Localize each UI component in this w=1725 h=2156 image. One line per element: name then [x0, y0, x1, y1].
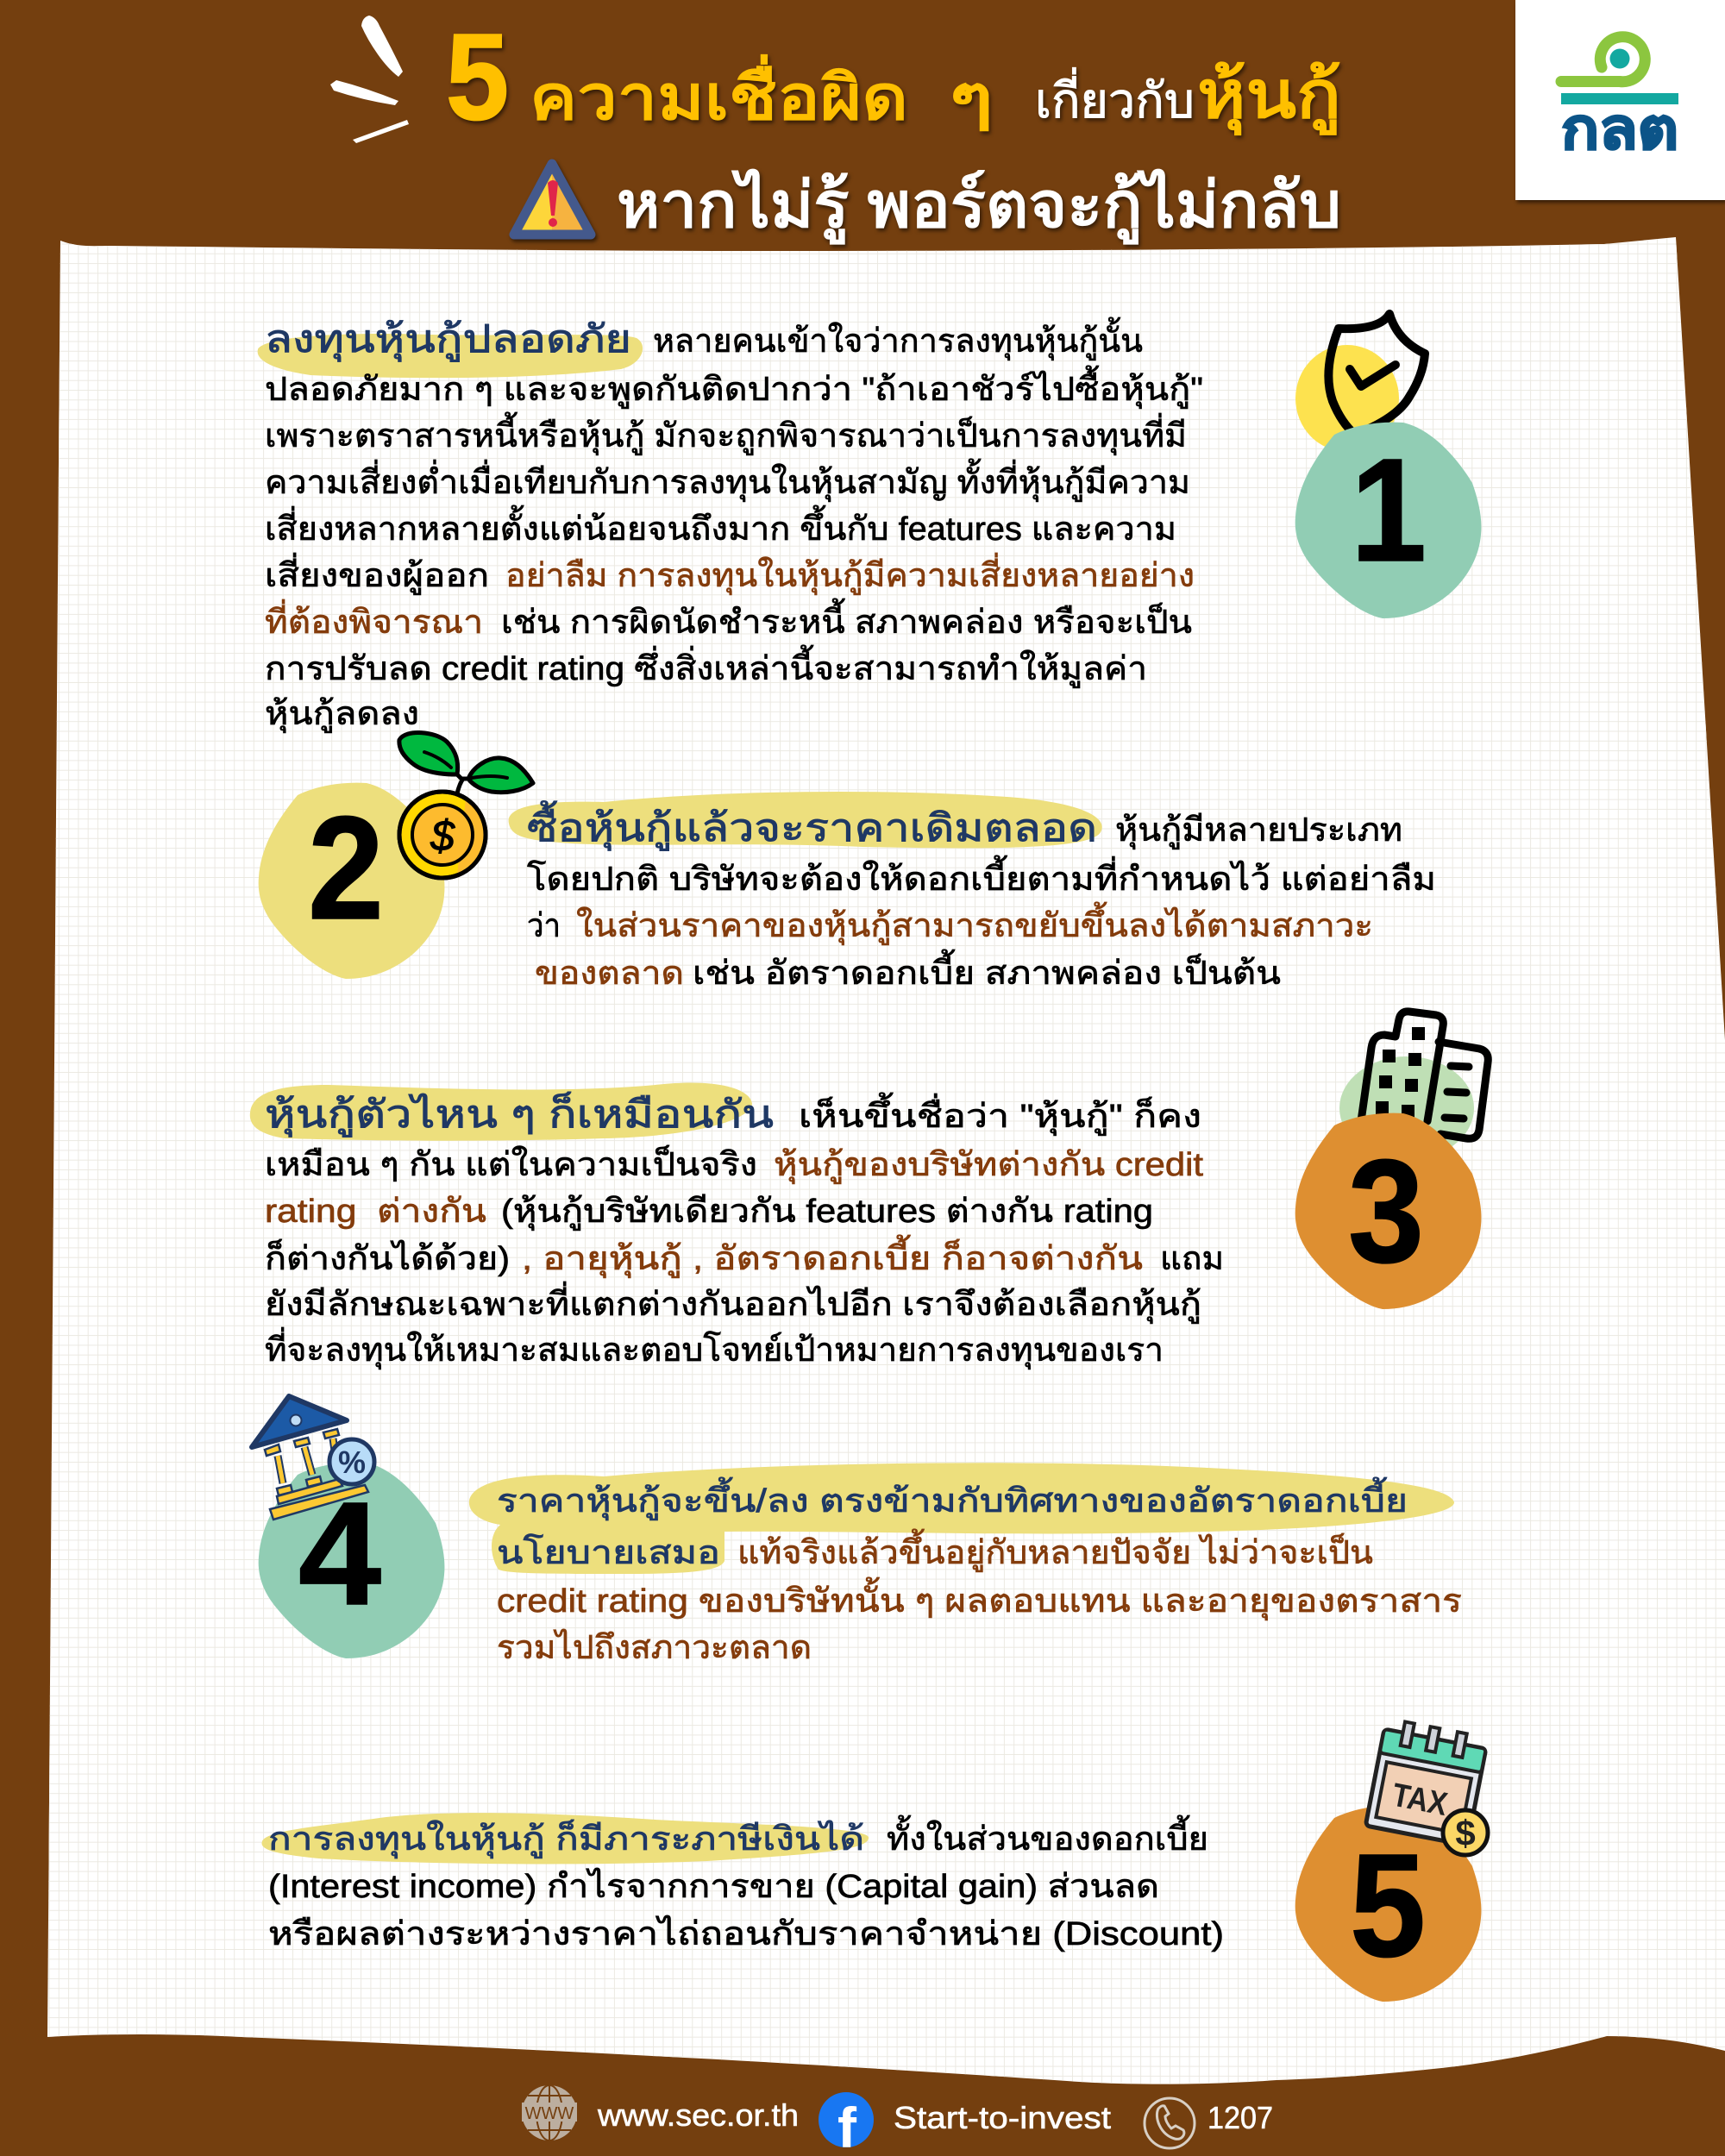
body text 1	[265, 317, 1203, 733]
title: หุ้นกู้	[1197, 59, 1341, 136]
body text 3: (หุ้นกู้บริษัทเดียวกัน features ต่างกัน rating	[501, 1194, 1153, 1231]
heading highlight 3	[250, 1082, 752, 1141]
icon: phone	[1145, 2098, 1195, 2148]
heading highlight 5	[262, 1813, 869, 1864]
title	[446, 9, 1341, 245]
number badge 1	[1295, 423, 1481, 618]
body text 5: ทั้งในส่วนของดอกเบี้ย	[887, 1814, 1208, 1858]
icon: facebook	[819, 2092, 874, 2156]
body text 2: ของตลาด	[535, 956, 684, 992]
number badge 4 background	[259, 1463, 444, 1658]
body text 4: แท้จริงแล้วขึ้นอยู่กับหลายปัจจัย ไม่ว่าจะเป็น	[737, 1528, 1373, 1572]
yellow circle	[1295, 345, 1399, 452]
body text 3: rating ต่างกัน	[265, 1194, 486, 1230]
body text 2	[527, 812, 1436, 992]
body text 4	[497, 1528, 1462, 1666]
icon: globe: WWW	[525, 2104, 574, 2123]
body text 1: เสี่ยงหลากหลายตั้งแต่น้อยจนถึงมาก ขึ้นกับ features และความ	[265, 505, 1176, 548]
body text 3: หุ้นกู้ของบริษัทต่างกัน credit	[774, 1147, 1203, 1184]
icon: shield	[1328, 314, 1425, 435]
footer	[522, 2085, 1273, 2156]
title line 2: หากไม่รู้ พอร์ตจะกู้ไม่กลับ	[617, 167, 1341, 245]
heading highlight 2	[509, 792, 1102, 848]
icon: coin with leaves: $	[430, 812, 455, 860]
website: www.sec.or.th	[597, 2097, 799, 2133]
body text 3: ก็ต่างกันได้ด้วย)	[265, 1238, 510, 1277]
body text 4: รวมไปถึงสภาวะตลาด	[497, 1629, 812, 1666]
body text 5: (Interest income) กำไรจากการขาย (Capital gain) ส่วนลด	[268, 1868, 1159, 1905]
body text 1: เช่น การผิดนัดชำระหนี้ สภาพคล่อง หรือจะเป็น	[501, 598, 1192, 641]
body text 3	[265, 1092, 1224, 1369]
section 5	[262, 1718, 1488, 2002]
title: เกี่ยวกับ	[1035, 67, 1195, 128]
heading 4: ราคาหุ้นกู้จะขึ้น/ลง ตรงข้ามกับทิศทางของอัตราดอกเบี้ย	[497, 1476, 1408, 1520]
number 4: 4	[298, 1472, 381, 1636]
icon: globe	[522, 2085, 577, 2140]
icon: warning triangle	[514, 164, 591, 235]
heading 1: ลงทุนหุ้นกู้ปลอดภัย	[265, 318, 631, 362]
title: ๆ	[949, 64, 994, 133]
section 3	[250, 1012, 1488, 1369]
body text 4: credit rating ของบริษัทนั้น ๆ ผลตอบแทน และอายุของตราสาร	[497, 1576, 1462, 1620]
body text 1: ความเสี่ยงต่ำเมื่อเทียบกับการลงทุนในหุ้นสามัญ ทั้งที่หุ้นกู้มีความ	[265, 458, 1190, 502]
heading 4	[497, 1476, 1408, 1571]
body text 2: เช่น อัตราดอกเบี้ย สภาพคล่อง เป็นต้น	[693, 949, 1281, 992]
body text 3: ยังมีลักษณะเฉพาะที่แตกต่างกันออกไปอีก เราจึงต้องเลือกหุ้นกู้	[265, 1282, 1201, 1324]
body text 1: หุ้นกู้ลดลง	[265, 696, 419, 733]
logo emblem	[1561, 37, 1678, 104]
body text 2: โดยปกติ บริษัทจะต้องให้ดอกเบี้ยตามที่กำหนดไว้ แต่อย่าลืม	[527, 855, 1436, 898]
heading 4: นโยบายเสมอ	[497, 1533, 720, 1571]
body text 1: ที่ต้องพิจารณา	[265, 599, 483, 641]
number badge 1: 1	[1351, 429, 1427, 592]
icon: bank with percent: %	[338, 1445, 366, 1480]
body text 3: , อายุหุ้นกู้ , อัตราดอกเบี้ย ก็อาจต่างกัน	[522, 1234, 1143, 1278]
icon: coin with leaves	[399, 733, 533, 878]
icon: buildings	[1361, 1012, 1488, 1138]
body text 1: ปลอดภัยมาก ๆ และจะพูดกันติดปากว่า "ถ้าเอาชัวร์ไปซื้อหุ้นกู้"	[265, 365, 1203, 409]
heading highlight 4	[469, 1463, 1454, 1574]
number badge 3	[1295, 1113, 1481, 1309]
number badge 2	[259, 783, 444, 979]
body text 5	[268, 1814, 1224, 1952]
heading 3: หุ้นกู้ตัวไหน ๆ ก็เหมือนกัน	[265, 1092, 774, 1138]
icon: bank with percent	[252, 1396, 374, 1520]
body text 1: อย่าลืม การลงทุนในหุ้นกู้มีความเสี่ยงหลายอย่าง	[505, 553, 1195, 595]
body text 3: เหมือน ๆ กัน แต่ในความเป็นจริง	[265, 1144, 757, 1183]
icon: tax calendar	[1365, 1718, 1488, 1855]
heading 5: การลงทุนในหุ้นกู้ ก็มีภาระภาษีเงินได้	[268, 1819, 864, 1858]
icon: tax calendar: $	[1455, 1813, 1476, 1853]
logo box	[1515, 0, 1725, 200]
body text 3: แถม	[1160, 1241, 1224, 1277]
section 1	[258, 314, 1481, 733]
body text 2: หุ้นกู้มีหลายประเภท	[1115, 812, 1402, 849]
title line 1: ความเชื่อผิด	[530, 53, 908, 133]
heading 2: ซื้อหุ้นกู้แล้วจะราคาเดิมตลอด	[527, 800, 1097, 851]
facebook page: Start-to-invest	[894, 2100, 1111, 2135]
heading highlight 1	[258, 334, 643, 378]
body text 1: เสี่ยงของผู้ออก	[265, 553, 489, 595]
logo wordmark: กลต	[1561, 97, 1678, 160]
burst lines	[330, 16, 409, 143]
title number: 5	[446, 9, 509, 146]
section 2	[259, 733, 1436, 992]
body text 2: ว่า	[527, 908, 561, 944]
body text 2: ในส่วนราคาของหุ้นกู้สามารถขยับขึ้นลงได้ตามสภาวะ	[576, 901, 1373, 945]
number badge 3: 3	[1348, 1130, 1424, 1294]
number badge 5: 5	[1350, 1824, 1426, 1988]
light green circle	[1339, 1056, 1474, 1160]
section 4	[252, 1396, 1462, 1666]
number badge 5	[1295, 1806, 1481, 2002]
body text 1: หลายคนเข้าใจว่าการลงทุนหุ้นกู้นั้น	[653, 317, 1143, 360]
body text 3: ที่จะลงทุนให้เหมาะสมและตอบโจทย์เป้าหมายการลงทุนของเรา	[265, 1327, 1164, 1369]
body text 3: เห็นขึ้นชื่อว่า "หุ้นกู้" ก็คง	[799, 1092, 1201, 1136]
number badge 2: 2	[308, 787, 384, 950]
body text 5: หรือผลต่างระหว่างราคาไถ่ถอนกับราคาจำหน่าย (Discount)	[268, 1915, 1224, 1952]
body text 1: การปรับลด credit rating ซึ่งสิ่งเหล่านี้จะสามารถทำให้มูลค่า	[265, 644, 1147, 688]
icon: tax calendar: TAX	[1389, 1777, 1451, 1823]
helpline: 1207	[1208, 2100, 1273, 2135]
body text 1: เพราะตราสารหนี้หรือหุ้นกู้ มักจะถูกพิจารณาว่าเป็นการลงทุนที่มี	[265, 411, 1187, 455]
